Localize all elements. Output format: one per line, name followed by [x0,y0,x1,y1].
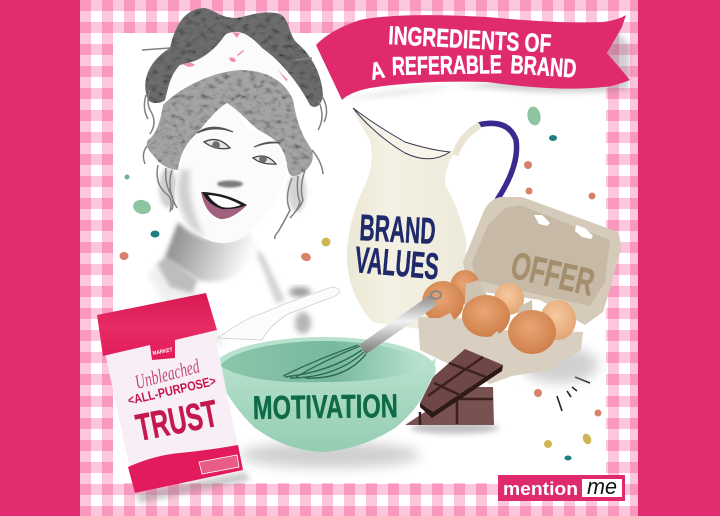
flour bag labelled trust [97,293,250,503]
title line 2: BRAND: BRAND [510,49,578,84]
gingham border panel [80,0,638,516]
trust label: TRUST [133,393,221,450]
nutrition icons [199,455,239,474]
bag top colour band [97,293,217,360]
right eye [253,155,276,164]
carton lid [463,197,621,325]
logo background [498,475,625,501]
lid label: OFFER [507,245,598,305]
jug handle [478,123,517,200]
chocolate bars [405,349,503,434]
left eyebrow [197,127,233,133]
headband pink spots [183,32,288,81]
title banner [316,15,630,100]
egg carton [418,197,621,384]
bowl label: MOTIVATION [253,387,398,426]
left eye [204,140,230,149]
neck [165,222,258,282]
carton front tabs [418,313,507,358]
bag shadow [135,472,250,503]
hand and pointing finger [218,287,339,340]
upper bar grooves [428,357,486,396]
carton shadow [522,347,598,383]
side curls [142,48,327,239]
black accent dashes [557,377,590,411]
chocolate shadow [411,422,499,434]
banner shadow [345,30,630,100]
upper bar side [420,365,503,418]
lower chocolate bar [405,387,494,425]
back eggs [422,270,576,340]
jug label line 2: VALUES [353,239,441,287]
sweater knit collar left [157,256,198,293]
script word: Unbleached [133,355,203,394]
sweater knit collar right [252,245,285,304]
bowl shadow [240,442,420,468]
bag body [97,293,243,493]
mixing bowl [212,291,441,468]
mouth [201,192,247,219]
title line 1: INGREDIENTS OF [388,20,552,59]
bowl interior [218,341,430,403]
sleeve shading [289,287,311,297]
upper curled hair [145,8,323,107]
fringe and side hair [147,70,313,176]
front eggs [462,295,556,354]
white inner panel [113,33,606,483]
mention me logo [498,474,625,501]
sleeve lower shading [295,312,311,334]
jug handle base [455,125,480,155]
logo white box [582,479,622,497]
all purpose line: <ALL-PURPOSE> [126,373,218,408]
lid holes [534,215,593,239]
lower bar grooves [420,399,493,425]
whisk wires [283,345,366,378]
left side curl mass [159,168,177,208]
whisk handle [359,295,437,354]
jug label line 1: BRAND [359,207,437,252]
illustration: smiling woman [142,8,339,345]
bag bottom colour band [128,445,243,493]
brand tag text: MARKET [152,347,174,357]
confetti dots [120,106,602,460]
whisk handle loop [431,291,441,299]
bowl front [212,358,436,452]
logo word mention: mention [503,479,578,499]
carton base [418,317,583,384]
title line 2: A: A [368,57,387,86]
jug body [347,108,466,332]
jug rim [353,108,450,159]
logo word me: me [587,474,617,499]
nose shadow [217,180,243,188]
upper chocolate bar [420,349,503,412]
carton lid inner [472,205,610,306]
right side curl mass [288,172,306,212]
face shading [178,170,205,236]
face [175,103,287,243]
bowl rim outer [212,337,436,403]
sweater left soft area [148,262,225,345]
headband [166,32,296,100]
title line 2: REFERABLE: REFERABLE [392,49,502,81]
carton dividers [464,280,533,330]
jug labelled brand values [347,108,517,332]
right eyebrow [254,142,280,147]
